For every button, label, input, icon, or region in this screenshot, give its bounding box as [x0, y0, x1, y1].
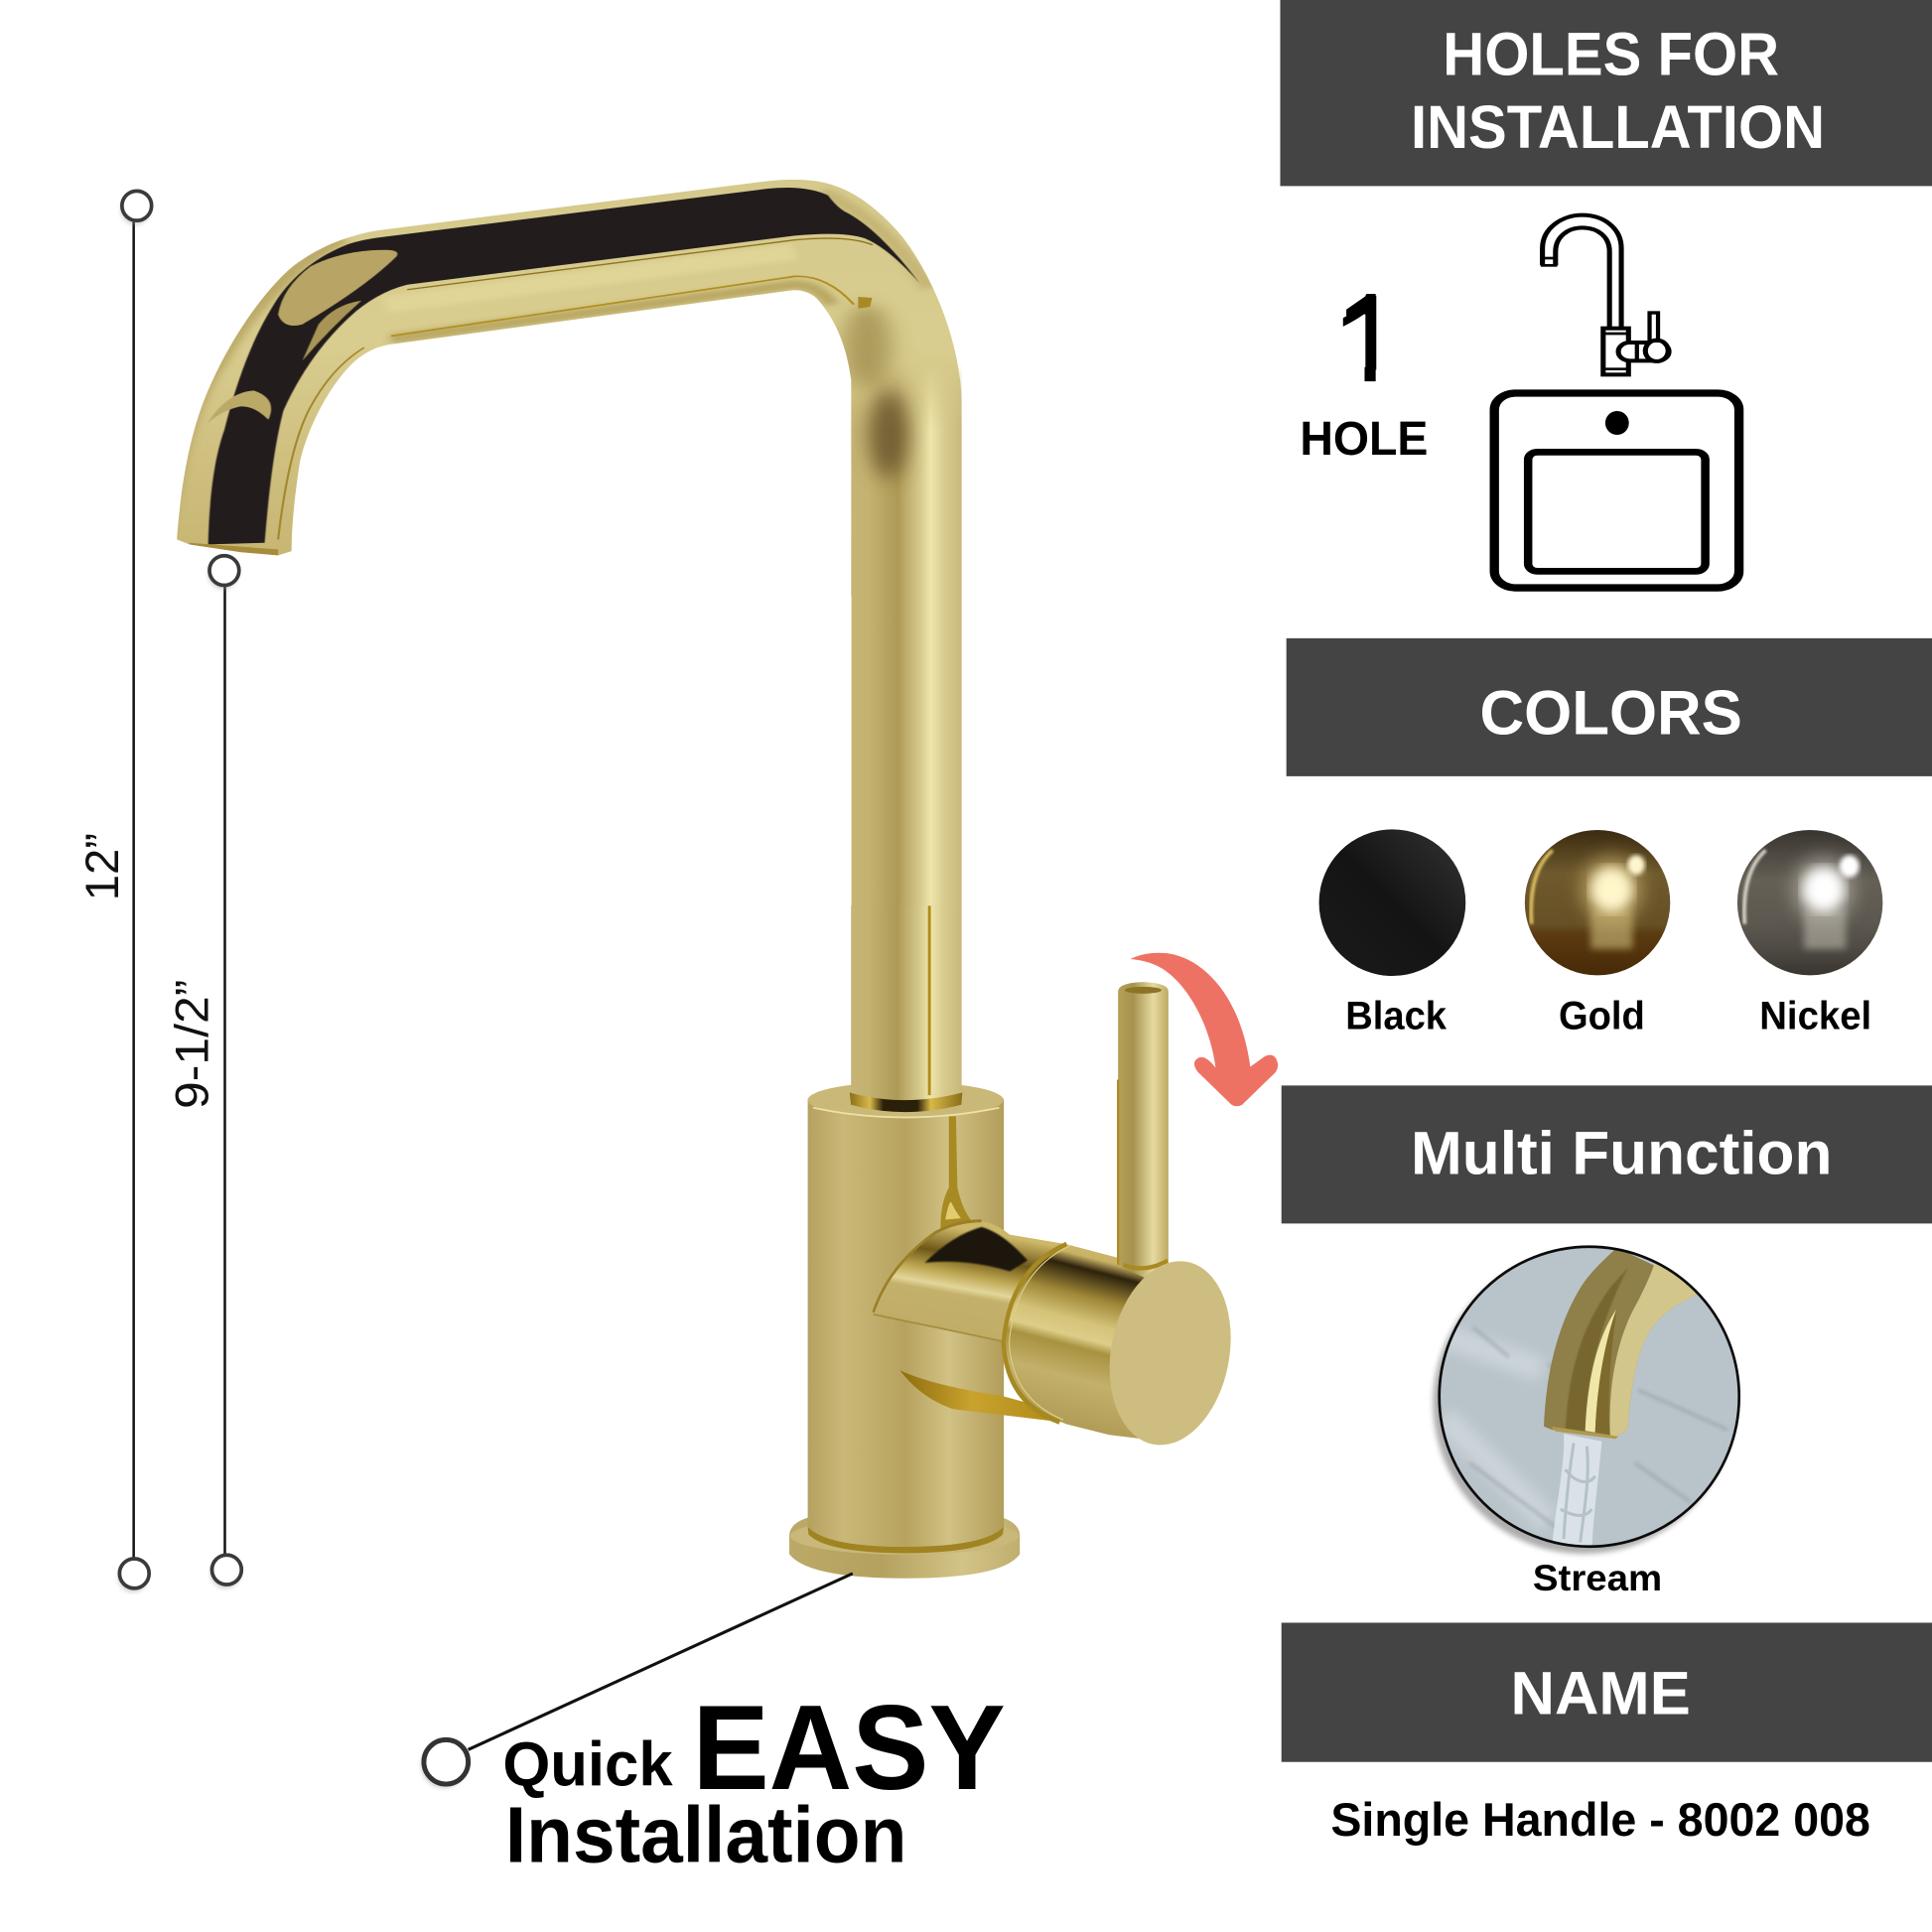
callout: quick easy installation: Installation [505, 1790, 906, 1878]
icon: sink with faucet [1494, 215, 1739, 588]
dimension: 12 inch height [75, 191, 152, 1591]
swatch: nickel [1737, 830, 1882, 1037]
faucet spout [160, 180, 961, 596]
handle cap [1091, 1242, 1250, 1464]
swatch: gold [1525, 830, 1670, 1037]
panel: holes for installation header: HOLES FOR [1443, 21, 1779, 88]
panel: holes for installation header: INSTALLATION [1411, 93, 1825, 161]
spout mirror reflection [208, 188, 919, 544]
panel: multi function header [1282, 1085, 1932, 1223]
stream label: Stream [1533, 1557, 1662, 1598]
dimension: 9-1/2 inch spout height [166, 556, 241, 1588]
product name: Single Handle - 8002 008 [1330, 1793, 1870, 1846]
swatch: nickel: Nickel [1759, 994, 1871, 1037]
panel: holes for installation header [1280, 0, 1932, 186]
panel: name header [1282, 1622, 1932, 1762]
panel: colors header [1287, 638, 1932, 776]
panel: colors header: COLORS [1480, 679, 1742, 749]
dimension: 9-1/2 inch spout height: 9-1/2” [166, 980, 218, 1109]
panel: name header: NAME [1511, 1659, 1691, 1726]
panel: multi function header: Multi Function [1411, 1120, 1832, 1187]
dimension: 12 inch height: 12” [75, 833, 128, 900]
callout: quick easy installation: Quick [502, 1729, 673, 1799]
one hole label [1303, 294, 1427, 455]
callout: quick easy installation [421, 1574, 1006, 1878]
faucet lower body and handle [789, 905, 1250, 1579]
swatch: black [1319, 829, 1465, 1037]
handle barrel [874, 1221, 1163, 1442]
body cylinder [808, 905, 1004, 1554]
one hole label: 1 [1334, 270, 1403, 407]
lever [1117, 982, 1169, 1278]
swatch: gold: Gold [1559, 994, 1645, 1037]
faucet vertical tube [852, 363, 962, 1103]
swatch: black: Black [1345, 994, 1448, 1037]
base plate [789, 1517, 1020, 1579]
stream photo circle [1430, 1246, 1739, 1554]
neck joint [851, 905, 961, 1101]
one hole label: HOLE [1300, 412, 1428, 466]
callout: quick easy installation: EASY [692, 1680, 1006, 1815]
arrow: handle direction [1131, 953, 1278, 1106]
